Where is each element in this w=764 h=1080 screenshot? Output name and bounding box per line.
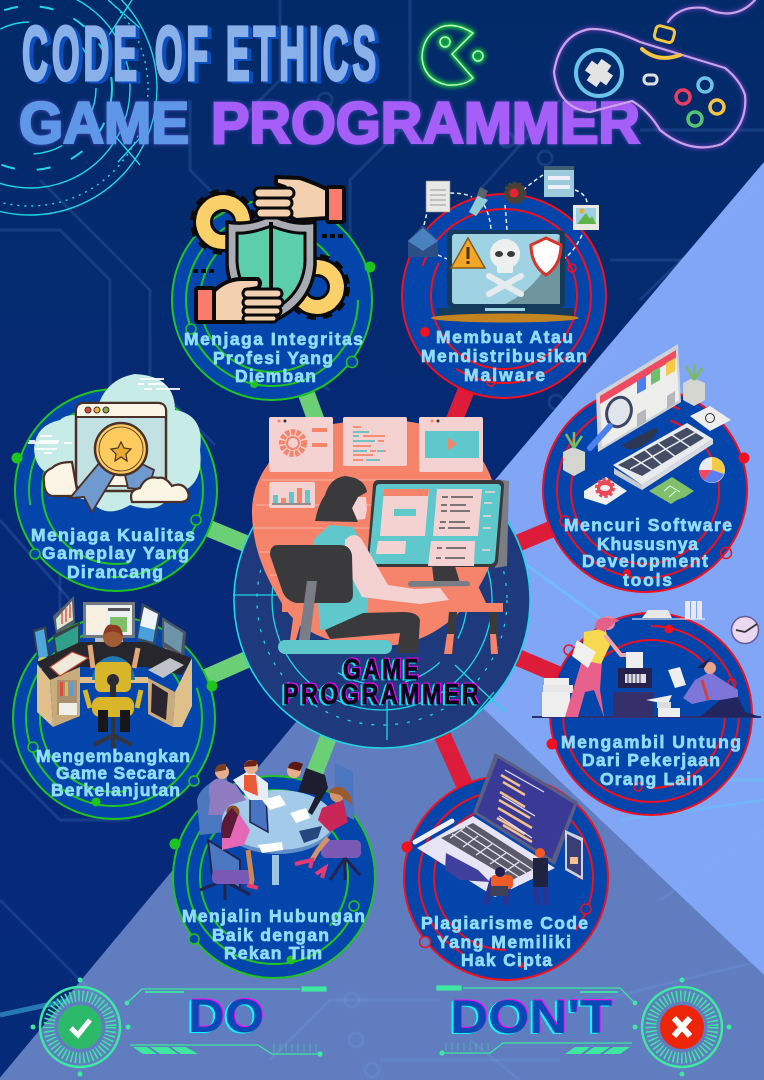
central illustration: programmer at desk [252,417,509,654]
panel: Mengambil Untung [532,601,761,815]
label: Mengembangkan [36,746,190,766]
title: game programmer: GAME [19,91,189,156]
label: Baik dengan [212,925,329,945]
title: game programmer: PROGRAMMER [211,91,640,156]
background muted blue triangle [0,615,764,1080]
panel: Mencuri Software [532,344,758,603]
label: Dirancang [67,562,163,582]
icon: shield hands gears [193,177,347,322]
label: Dari Pekerjaan [582,750,720,770]
label: Diemban [235,366,316,386]
panel: Menjalin Hubungan [155,758,393,996]
central circle [233,452,530,748]
label: Hak Cipta [461,950,552,970]
label: Menjalin Hubungan [182,906,365,926]
label: Membuat Atau [436,327,573,347]
icon: pacman [422,25,483,85]
label [182,906,365,963]
programmer figure [313,476,449,653]
icon: laptop with skull and malware icons [408,166,599,322]
label [561,732,741,789]
label [36,746,190,800]
label: Profesi Yang [213,348,333,368]
label: Menjaga Kualitas [31,525,195,545]
panel: Menjaga Kualitas [12,374,217,591]
label: Yang Memiliki [437,932,571,952]
central label: GAME [343,654,421,686]
label: Khususnya [597,534,698,554]
panel: Menjaga Integritas [171,177,376,401]
DO label: DO [188,989,264,1042]
central label [283,654,481,711]
label: Development [582,551,708,571]
panel video [419,417,483,472]
label: Orang Lain [600,769,703,789]
panel: Mengembangkan Game [1,596,227,831]
label: Menjaga Integritas [184,329,363,349]
panel bar chart [269,482,315,508]
illustration: developer workstation [33,596,192,748]
panel: Plagiarisme Code [387,753,625,997]
label: Malware [464,365,545,385]
background light blue triangle [385,162,764,1080]
panel: Membuat Malware [392,166,616,408]
panel code [343,417,407,466]
central label: PROGRAMMER [283,679,481,711]
salmon blob [252,419,498,646]
illustration: laptop with code [415,753,583,905]
label [564,515,732,590]
DON'T label: DON'T [450,990,612,1043]
icon: neon game controller [554,0,755,147]
office chair [270,545,392,654]
label: Mendistribusikan [421,346,587,366]
monitor [367,479,509,587]
label: tools [623,570,672,590]
connector lines [114,296,651,878]
illustration: team meeting [197,760,361,900]
desk [282,586,503,654]
label: Plagiarisme Code [421,913,588,933]
DON'T badge [632,978,732,1076]
label: Rekan Tim [224,943,322,963]
label [31,525,195,582]
icon: isometric computer [563,344,731,505]
label: Gameplay Yang [42,543,189,563]
label [421,327,587,385]
label [421,913,588,970]
title: game programmer [19,91,640,156]
label: Mengambil Untung [561,732,741,752]
panel gear [269,417,333,472]
label [184,329,363,386]
DON'T HUD frame [437,986,637,1055]
label: Berkelanjutan [51,780,180,800]
illustration: quality medal on window [28,374,201,512]
label: Mencuri Software [564,515,732,535]
DO HUD frame [125,987,326,1056]
illustration: taking profit from others [532,601,761,717]
DO badge [30,978,130,1076]
label: Game Secara [56,763,175,783]
radar rings top left [0,0,157,215]
